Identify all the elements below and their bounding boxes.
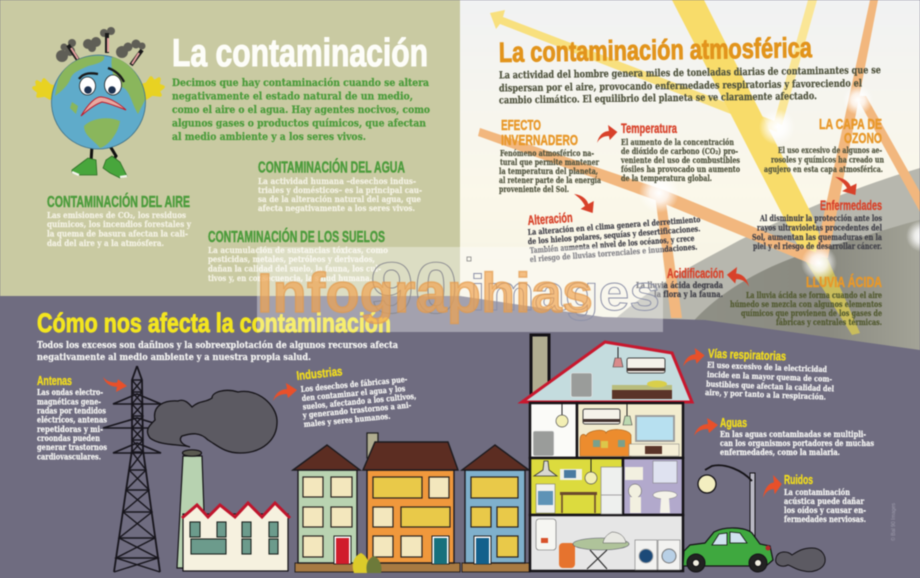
arrow: aguas (694, 418, 718, 436)
body text: La lluvia ácida se forma cuando el aire (746, 290, 882, 300)
arrow: to temperatura (597, 125, 617, 143)
section: ruidos (784, 473, 866, 524)
body text: Fenómeno atmosférico na- (500, 148, 594, 158)
body text: afecta negativamente a los seres vivos. (258, 203, 415, 213)
illustration: cross-section house (522, 335, 692, 571)
bathroom fixtures (625, 461, 677, 513)
heading: Temperatura (621, 121, 677, 136)
arrow: industrias (273, 383, 297, 401)
section: contaminación del agua (258, 158, 422, 213)
kitchen furniture (534, 459, 622, 514)
illustration: green car with exhaust (683, 528, 825, 572)
section: la capa de ozono (764, 116, 884, 174)
text block: intro definition: como el aire o el agua. Hay agentes nocivos, como (172, 104, 430, 116)
globe (52, 55, 146, 149)
body text: proveniente del Sol. (499, 184, 569, 194)
body text: la quema de basura afectan la cali- (47, 228, 188, 238)
title: Cómo nos afecta la contaminación: Cómo nos afecta la contaminación (37, 308, 391, 338)
body text: fábricas y centrales térmicas. (776, 317, 882, 327)
heading (501, 117, 578, 149)
text block: effects intro: negativamente al medio ambiente y a nuestra propia salud. (37, 352, 311, 363)
body text: generar trastornos (37, 442, 107, 452)
text block: intro definition: negativamente el estado natural de un medio, (172, 90, 413, 102)
text block: intro definition: Decimos que hay contaminación cuando se altera (172, 77, 429, 89)
body text: fósiles ha provocado un aumento (621, 164, 741, 174)
body text: veniente del uso de combustibles (620, 155, 740, 165)
section: enfermedades (752, 198, 882, 251)
section: antenas (37, 374, 107, 461)
heading: Enfermedades (820, 198, 882, 213)
body text: Sol, aumentan las quemaduras en la (752, 232, 882, 242)
section: lluvia ácida (730, 274, 882, 327)
body text: También aumenta el nivel de los océanos, y crece (529, 233, 695, 255)
body text: químicos que provienen de los gases de (741, 308, 882, 318)
illustration: factory smoke cloud (147, 390, 277, 453)
body text: húmedo se mezcla con algunos elementos (730, 299, 882, 309)
body text (730, 290, 882, 327)
arrow: to alteración (574, 194, 594, 213)
body text: La alteración en el clima genera el derretimiento (527, 214, 701, 237)
eyes (79, 68, 124, 95)
section: aguas (720, 416, 874, 457)
body text: Los desechos de fábricas pue- (300, 374, 408, 394)
body text: tivos y, en consecuencia, la salud humana. (208, 273, 372, 283)
car body (683, 528, 773, 566)
text block: intro definition (172, 77, 430, 143)
heading: Alteración (527, 210, 573, 228)
heading: CONTAMINACIÓN DEL AGUA (258, 158, 405, 176)
body text: El uso excesivo de algunos ae- (778, 145, 882, 155)
body text: dad del aire y a la atmósfera. (47, 238, 164, 248)
orange house (363, 442, 458, 564)
body text: la temperatura del planeta, (499, 166, 598, 176)
blue house (462, 445, 529, 564)
attic with red roof (522, 342, 692, 402)
illustration: sad planet earth mascot (34, 27, 163, 178)
section: temperatura (620, 121, 741, 183)
body text: rosoles y químicos ha creado un (771, 154, 884, 164)
body text: químicos, los incendios forestales y (47, 219, 191, 229)
text block: intro definition: al medio ambiente y a los seres vivos. (172, 131, 366, 143)
text block: effects intro: Todos los excesos son dañinos y la sobreexplotación de algunos recursos afecta (37, 340, 398, 351)
body text (499, 148, 601, 194)
tail light (766, 546, 770, 550)
body text (620, 137, 741, 183)
watermark: Infographias (257, 261, 593, 324)
panel: atmosphere background with sky, hills and rays (460, 0, 920, 350)
attic furniture (571, 347, 672, 399)
body text: El aumento de la concentración (621, 137, 734, 147)
body text: suelos, afectando a los cultivos, (302, 391, 417, 411)
body text: enfermedades, como la malaria. (720, 447, 840, 457)
body text (208, 245, 389, 283)
body text: cardiovasculares. (37, 451, 101, 461)
body text: de dióxido de carbono (CO₂) pro- (621, 146, 738, 156)
heading (819, 116, 882, 147)
car windows (712, 532, 747, 545)
building (183, 514, 288, 571)
text block: atmosphere intro: cambio climático. El equilibrio del planeta se ve claramente afectado. (499, 91, 817, 106)
floors (530, 403, 577, 458)
body text: Las emisiones de CO₂, los residuos (47, 210, 186, 220)
body text: males y seres humanos. (303, 411, 391, 429)
body text: tural que permite mantener (500, 157, 600, 167)
body text: La contaminación (784, 487, 850, 497)
heading: OZONO (844, 130, 882, 147)
body text: pesticidas, metales, petróleos y derivados, (208, 254, 375, 264)
illustration: street lamp (698, 465, 755, 539)
body text: La acumulación de sustancias tóxicas, como (208, 245, 389, 255)
text block: atmosphere intro (499, 65, 881, 106)
heading: CONTAMINACIÓN DE LOS SUELOS (208, 228, 385, 246)
heading: Aguas (720, 416, 747, 430)
body text: agujero en esta capa atmosférica. (764, 164, 883, 174)
panel: cómo nos afecta (purple background) (0, 296, 920, 578)
body text: La actividad humana –desechos indus- (258, 176, 416, 186)
body text: la flora y la fauna. (654, 289, 723, 299)
arrow: to enfermedades (835, 177, 857, 195)
body text: fermedades nerviosas. (784, 514, 866, 524)
arrow: ruidos (763, 475, 782, 498)
section: contaminación de los suelos (208, 228, 389, 283)
body text: El uso excesivo de la electricidad (707, 360, 828, 374)
heading: Antenas (37, 374, 72, 388)
brown base strip (295, 563, 530, 572)
heading: Ruidos (784, 473, 813, 487)
chimney (531, 335, 549, 403)
body text: el riesgo de lluvias torrenciales e inundaciones. (529, 241, 698, 264)
watermark: 90 (370, 249, 458, 329)
body text: can los organismos portadores de muchas (720, 438, 874, 448)
green house (293, 445, 360, 564)
heading: Vías respiratorias (708, 347, 786, 363)
body text (720, 429, 874, 457)
section: vías respiratorias (705, 347, 834, 402)
heading: CONTAMINACIÓN DEL AIRE (47, 193, 190, 211)
body text: triales y domésticos– es la principal cau- (258, 185, 422, 195)
body text: los oídos y causar en- (784, 505, 866, 515)
illustration: factory with chimney (177, 450, 290, 571)
body text: La lluvia ácida degrada (636, 280, 723, 290)
text block: effects intro (37, 340, 398, 363)
section: contaminación del aire (47, 193, 191, 248)
body text: bustibles que afectan la calidad del (706, 379, 834, 393)
exhaust smoke (776, 548, 825, 572)
wheels (687, 554, 767, 572)
watermark (257, 247, 663, 332)
section: alteración (527, 210, 701, 264)
body text (47, 210, 191, 248)
body text: croondas pueden (37, 433, 100, 443)
section: industrias (296, 364, 417, 429)
legs and shoes (72, 146, 127, 178)
body text: sa de la alteración natural del agua, que (258, 194, 421, 204)
hands (34, 78, 163, 98)
body text (705, 360, 834, 402)
body text: den contaminar el agua y los (301, 383, 406, 403)
heading: INVERNADERO (501, 132, 578, 149)
body text (752, 213, 882, 251)
body text (300, 374, 417, 429)
heading: LA CAPA DE (819, 116, 882, 133)
red sawtooth roof (182, 503, 290, 518)
illustration: row of houses (293, 433, 530, 573)
body text: piel y el riesgo de desarrollar cáncer. (753, 241, 882, 251)
text block: intro definition: algunos gases o productos químicos, que afectan (172, 118, 426, 130)
trash bags (353, 553, 382, 573)
living room furniture (533, 404, 679, 456)
credit text: © Bal 90 Images (890, 502, 897, 541)
body text: incide en la mayor quema de com- (707, 369, 832, 384)
body text: Al disminuir la protección ante los (759, 213, 882, 223)
body text: magnéticas gene- (37, 396, 101, 406)
arrow: to acidificación (727, 267, 749, 287)
watermark: images (470, 265, 660, 321)
body text: al retener parte de la energía (499, 175, 601, 185)
heading: EFECTO (501, 117, 541, 134)
body text: En las aguas contaminadas se multipli- (720, 429, 866, 439)
section: efecto invernadero (499, 117, 601, 194)
chimney (177, 456, 206, 568)
heading: Industrias (296, 364, 343, 383)
title: La contaminación atmosférica: La contaminación atmosférica (499, 32, 812, 68)
continents (55, 56, 145, 148)
body text: aire, y por tanto a la respiración. (705, 387, 826, 402)
section: acidificación (636, 266, 724, 299)
illustration: electricity pylon (103, 366, 170, 572)
body text: Las ondas electro- (37, 387, 103, 397)
sad mouth (81, 97, 126, 116)
heading: Acidificación (667, 266, 724, 281)
title: La contaminación: La contaminación (172, 32, 428, 75)
body text: y generando trastornos a ani- (301, 400, 412, 420)
arrow: antenas (103, 377, 127, 392)
body text: de la temperatura global. (621, 173, 712, 183)
body text (37, 387, 107, 461)
body text (527, 214, 701, 264)
body text (764, 145, 884, 174)
windows (190, 522, 278, 554)
body text: rayos ultravioletas procedentes del (757, 222, 882, 232)
utility room appliances (536, 519, 680, 570)
heading: LLUVIA ÁCIDA (806, 274, 882, 291)
body text (636, 280, 723, 299)
body text: eléctricos, antenas (37, 415, 107, 425)
chimney (367, 433, 378, 458)
body text: repetidoras y mi- (37, 424, 103, 434)
panel: la contaminación (olive background) (0, 0, 460, 297)
arrow: vías respiratorias (683, 348, 705, 367)
body text: radas por tendidos (37, 406, 106, 416)
body text: de los hielos polares, sequías y desertificaciones. (527, 223, 701, 246)
body text: acústica puede dañar (784, 496, 865, 506)
smokestacks and smoke (56, 27, 146, 65)
body text: dañan la calidad del suelo, la fauna, los cul- (208, 264, 381, 274)
body text (784, 487, 866, 524)
body text (258, 176, 422, 213)
